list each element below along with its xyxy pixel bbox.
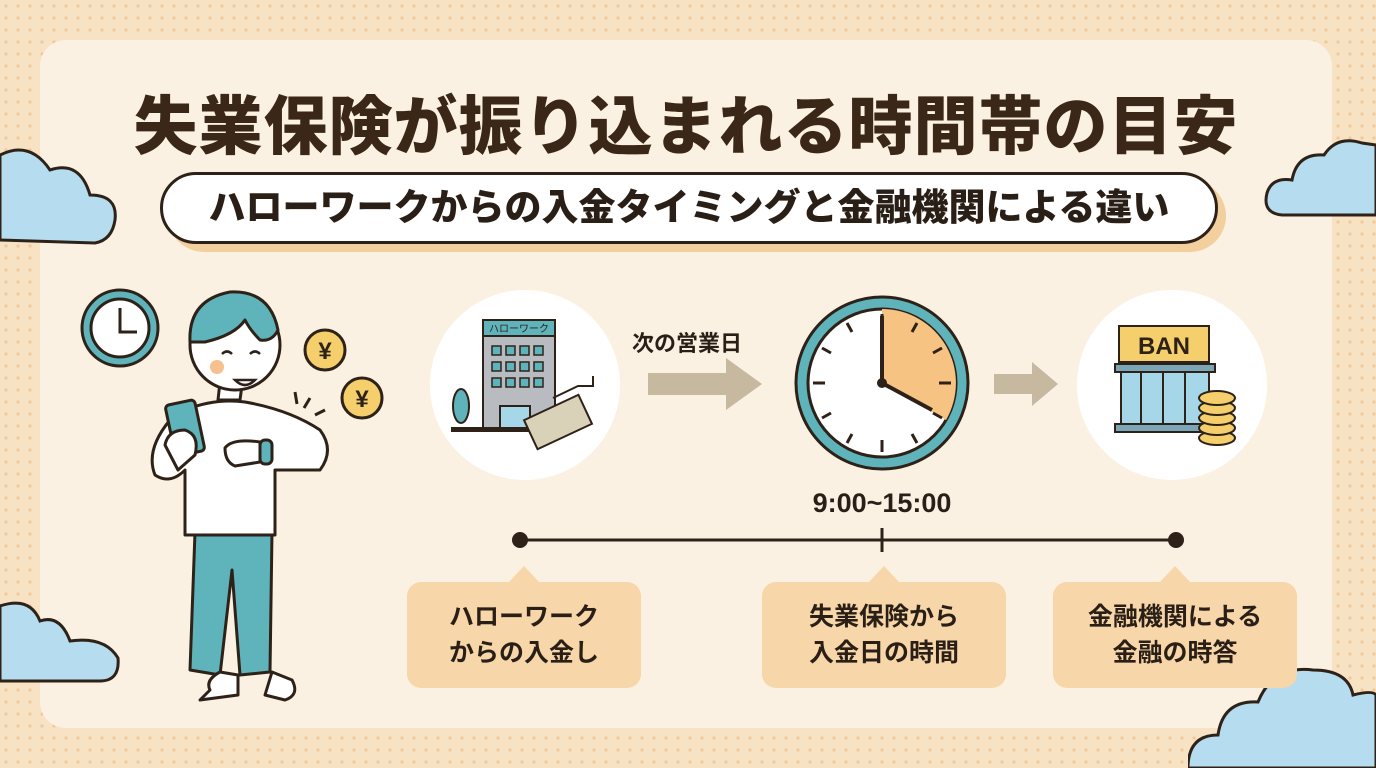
callout 2 — [762, 582, 1006, 688]
icon: yen coins: ¥ — [355, 386, 369, 413]
callout 3 — [1053, 582, 1297, 688]
callout 3: 金融の時答 — [1112, 639, 1238, 667]
callout 1: ハローワーク — [449, 603, 599, 631]
cloud right top — [1264, 139, 1376, 216]
callout 3: 金融機関による — [1088, 603, 1262, 631]
icon: hello work building circle — [430, 290, 620, 480]
title: 失業保険が振り込まれる時間帯の目安 — [134, 91, 1238, 163]
cloud left top — [0, 148, 117, 244]
icon: yen coins — [295, 330, 382, 418]
cloud left bottom — [0, 602, 120, 682]
subtitle: ハローワークからの入金タイミングと金融機関による違い — [209, 187, 1169, 228]
person body — [152, 292, 328, 700]
cloud right bottom — [1188, 668, 1376, 768]
label: next business day: 次の営業日 — [632, 331, 742, 356]
callout 1 — [407, 582, 641, 688]
callout 1: からの入金し — [449, 639, 599, 667]
illustration: person — [80, 288, 384, 702]
icon: bank — [1077, 290, 1267, 480]
icon: wall clock — [82, 290, 158, 366]
subtitle — [160, 172, 1218, 244]
callout 2: 入金日の時間 — [809, 639, 959, 667]
icon: yen coins: ¥ — [318, 338, 332, 365]
icon: hello work building circle: ハローワーク — [489, 323, 549, 335]
icon: bank: BAN — [1138, 333, 1190, 360]
arrow 2 — [994, 362, 1058, 406]
callout 2: 失業保険から — [809, 603, 959, 631]
time label: 9:00~15:00 — [813, 488, 951, 518]
icon: clock — [794, 296, 970, 470]
arrow 1 — [648, 358, 762, 410]
timeline — [512, 528, 1184, 552]
